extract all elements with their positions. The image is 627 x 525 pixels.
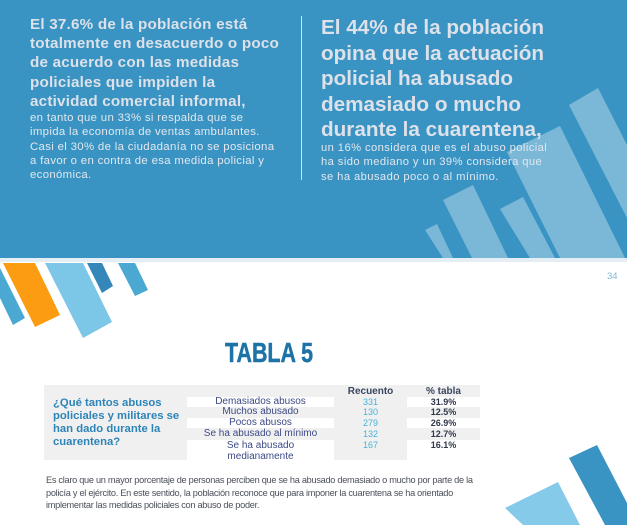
value: 12.5%: [431, 407, 456, 417]
table question: policiales y militares se: [53, 410, 179, 422]
decorative bars: top panel: [425, 88, 627, 258]
text block: left body: económica.: [30, 169, 92, 181]
row: Pocos abusos: Pocos abusos: [229, 417, 292, 428]
white row bands: [187, 397, 334, 407]
table question: ¿Qué tantos abusos: [53, 396, 162, 408]
divider: [301, 16, 302, 180]
text block: right heading: demasiado o mucho: [321, 93, 521, 116]
row: Se ha abusado medianamente: Se ha abusado: [227, 440, 294, 451]
text block: right body: [321, 142, 547, 183]
value: 130: [363, 407, 378, 417]
text block: conclusion: Es claro que un mayor porcentaje de personas perciben que se ha abusado demasiado o mucho por parte de la: [46, 475, 473, 485]
text block: right heading: [321, 16, 544, 141]
row: Muchos abusado: Muchos abusado: [222, 406, 299, 417]
strip under header: [0, 258, 627, 262]
text block: left heading: totalmente en desacuerdo o poco: [30, 35, 279, 52]
row: Se ha abusado al mínimo: Se ha abusado al mínimo: [204, 428, 317, 439]
value: 26.9%: [431, 418, 456, 428]
value: 331: [363, 397, 378, 407]
text block: right body: se ha abusado poco o al mínimo.: [321, 171, 499, 183]
value: 16.1%: [431, 440, 456, 450]
value: 12.7%: [431, 429, 456, 439]
text block: left heading: [30, 16, 279, 110]
text block: left heading: de acuerdo con las medidas: [30, 54, 239, 71]
value: 31.9%: [431, 397, 456, 407]
panel: blue header: [0, 0, 627, 258]
text block: conclusion: policía y el ejército. En este sentido, la población reconoce que para imponer la cuarentena se ha orientado: [46, 488, 453, 498]
text block: right body: un 16% considera que es el abuso policial: [321, 142, 547, 154]
row: Se ha abusado medianamente: [227, 440, 294, 462]
text block: conclusion: implementar las medidas policiales con abuso de poder.: [46, 500, 259, 510]
column header: % tabla: % tabla: [426, 386, 461, 397]
text block: left heading: policiales que impiden la: [30, 74, 215, 91]
text block: right heading: durante la cuarentena,: [321, 118, 542, 141]
text block: left body: Casi el 30% de la ciudadanía no se posiciona: [30, 141, 274, 153]
text block: right heading: opina que la actuación: [321, 42, 544, 65]
text block: left heading: actividad comercial informal,: [30, 93, 246, 110]
row: Se ha abusado medianamente: medianamente: [227, 451, 294, 462]
page number: 34: [607, 271, 618, 282]
value: 167: [363, 440, 378, 450]
text block: left body: [30, 112, 274, 181]
text block: left body: a favor o en contra de esa medida policial y: [30, 155, 264, 167]
text block: right body: ha sido mediano y un 39% considera que: [321, 156, 542, 168]
column header: Recuento: Recuento: [348, 386, 393, 397]
text block: left body: en tanto que un 33% si respalda que se: [30, 112, 243, 124]
title: TABLA 5: [225, 337, 313, 368]
table question: cuarentena?: [53, 436, 120, 448]
value: 132: [363, 429, 378, 439]
text block: right heading: policial ha abusado: [321, 67, 513, 90]
value: 279: [363, 418, 378, 428]
text block: left body: impida la economía de ventas ambulantes.: [30, 126, 260, 138]
text block: right heading: El 44% de la población: [321, 16, 544, 39]
text block: left heading: El 37.6% de la población está: [30, 16, 247, 32]
table: [44, 385, 480, 460]
text block: conclusion: [46, 475, 473, 510]
row: Demasiados abusos: Demasiados abusos: [215, 396, 306, 407]
table question: [53, 396, 179, 448]
table question: han dado durante la: [53, 422, 160, 434]
